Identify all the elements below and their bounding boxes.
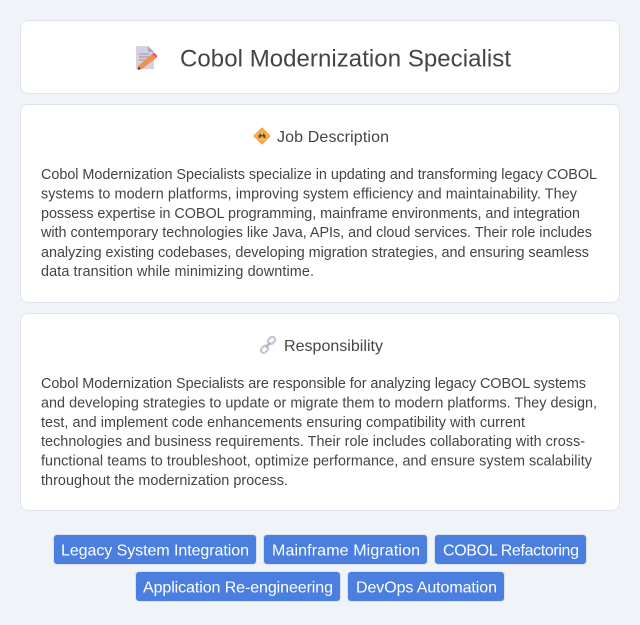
heading: responsibility: Responsibility	[284, 338, 383, 355]
text block: responsibility: and developing strategies to update or migrate them to modern platforms. They design,	[41, 396, 597, 412]
text block: job description: data transition while minimizing downtime.	[41, 264, 314, 280]
icon: job description diamond	[254, 128, 270, 144]
tag: Mainframe Migration: Mainframe Migration	[272, 542, 420, 560]
panel: job description	[20, 104, 620, 303]
text block: responsibility: Cobol Modernization Specialists are responsible for analyzing legacy COBOL systems	[41, 376, 586, 392]
text block: responsibility	[41, 376, 597, 489]
text block: job description: Cobol Modernization Specialists specialize in updating and transforming legacy COBOL	[41, 167, 597, 183]
icon: document with pencil	[136, 46, 158, 70]
tag: Legacy System Integration: Legacy System Integration	[61, 542, 249, 560]
icon: chain link	[260, 336, 276, 354]
text block: responsibility: throughout the modernization process.	[41, 473, 288, 489]
tag: Application Re-engineering	[135, 571, 341, 602]
tag: Application Re-engineering: Application Re-engineering	[143, 580, 333, 596]
panel: responsibility	[20, 313, 620, 511]
tag: COBOL Refactoring: COBOL Refactoring	[443, 542, 579, 560]
title: Cobol Modernization Specialist	[180, 46, 511, 72]
text block: responsibility: functional teams to troubleshoot, optimize performance, and ensure system scalability	[41, 454, 593, 470]
tag: DevOps Automation	[347, 571, 505, 602]
tag: Mainframe Migration	[263, 534, 428, 565]
text block: responsibility: technologies and business requirements. Their role includes collaborating with cross-	[41, 434, 585, 450]
text block: responsibility: test, and implement code enhancements ensuring compatibility with current	[41, 415, 525, 431]
tag: Legacy System Integration	[53, 534, 257, 565]
tag: DevOps Automation: DevOps Automation	[356, 580, 497, 596]
heading: job description: Job Description	[277, 129, 389, 146]
text block: job description: analyzing existing codebases, developing migration strategies, and ensuring seamless	[41, 245, 589, 261]
text block: job description: with contemporary technologies like Java, APIs, and cloud services. Their role includes	[40, 225, 592, 241]
tag: COBOL Refactoring	[434, 534, 587, 565]
text block: job description: systems to modern platforms, improving system efficiency and maintainability. They	[41, 186, 578, 202]
panel: title card	[20, 20, 620, 94]
text block: job description	[40, 167, 597, 280]
text block: job description: possess expertise in COBOL programming, mainframe environments, and integration	[41, 206, 580, 222]
